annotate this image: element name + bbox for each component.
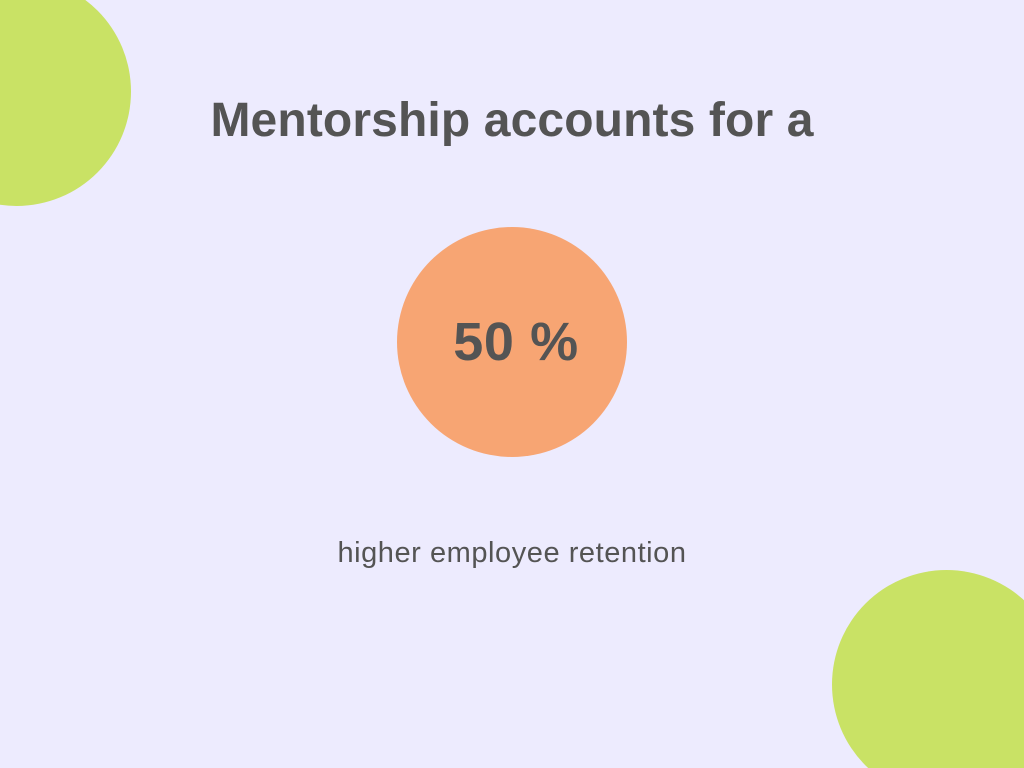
stat value: 50 % bbox=[453, 312, 579, 372]
title: Mentorship accounts for a bbox=[210, 94, 814, 147]
decorative circle: top left bbox=[0, 0, 131, 206]
caption: higher employee retention bbox=[337, 537, 687, 569]
stat circle bbox=[397, 227, 627, 457]
decorative circle: bottom right bbox=[832, 570, 1024, 768]
